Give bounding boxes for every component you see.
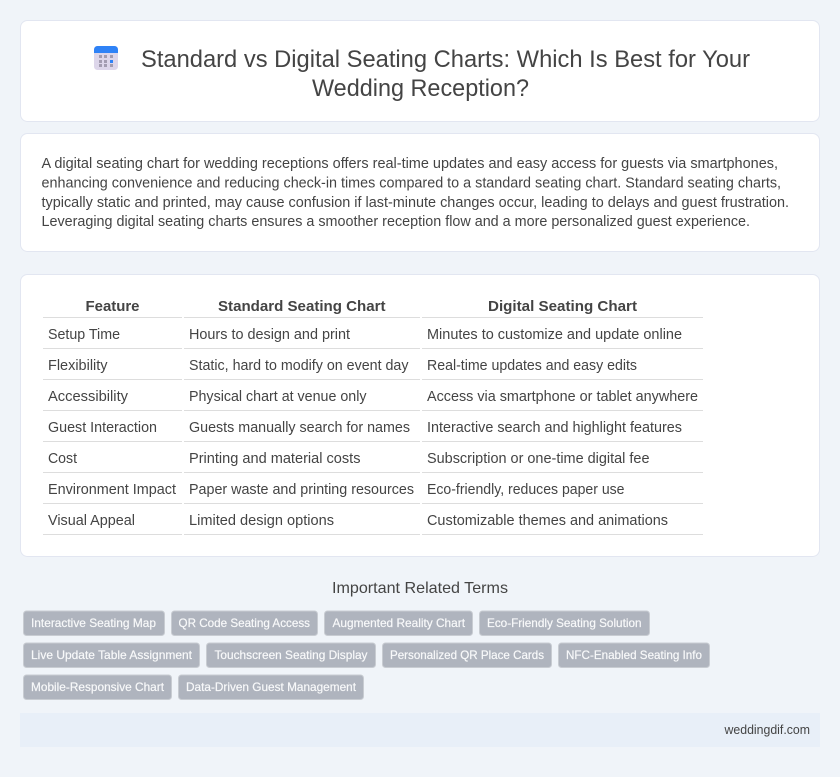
tag: Augmented Reality Chart bbox=[332, 616, 466, 630]
tag bbox=[24, 643, 200, 668]
row: guest interaction: Guests manually search for names bbox=[189, 420, 410, 436]
row: flexibility: Real-time updates and easy edits bbox=[427, 358, 637, 374]
panel: introduction text bbox=[20, 134, 820, 252]
row: environment impact bbox=[48, 482, 624, 498]
row: guest interaction: Interactive search and highlight features bbox=[427, 420, 682, 436]
table header: Feature bbox=[86, 298, 140, 315]
tag bbox=[324, 611, 472, 636]
panel: comparison table bbox=[20, 274, 820, 556]
row: flexibility bbox=[48, 358, 637, 374]
row: environment impact: Paper waste and printing resources bbox=[189, 482, 414, 498]
title: Wedding Reception? bbox=[312, 75, 529, 102]
row: visual appeal bbox=[48, 513, 668, 529]
footer: weddingdif.com bbox=[724, 723, 810, 737]
title: Standard vs Digital Seating Charts: Which Is Best for Your bbox=[141, 46, 750, 73]
row: visual appeal: Limited design options bbox=[189, 513, 334, 529]
row: visual appeal: Visual Appeal bbox=[48, 513, 135, 529]
row: environment impact: Eco-friendly, reduces paper use bbox=[427, 482, 624, 498]
row: accessibility: Physical chart at venue only bbox=[189, 389, 367, 405]
table header: Digital Seating Chart bbox=[488, 298, 637, 315]
row: flexibility: Static, hard to modify on event day bbox=[189, 358, 409, 374]
row: cost: Subscription or one-time digital fee bbox=[427, 451, 650, 467]
tag: QR Code Seating Access bbox=[178, 616, 310, 630]
panel: introduction text: A digital seating chart for wedding receptions offers real-time updates and easy access for guests via smartphones, bbox=[42, 156, 778, 172]
tag bbox=[206, 643, 376, 668]
tag: Eco-Friendly Seating Solution bbox=[487, 616, 642, 630]
row: cost bbox=[48, 451, 650, 467]
title bbox=[141, 46, 750, 102]
icon: calendar seating grid bbox=[94, 46, 118, 70]
tag: Personalized QR Place Cards bbox=[390, 648, 544, 662]
row: visual appeal: Customizable themes and animations bbox=[427, 513, 668, 529]
row: setup time: Minutes to customize and update online bbox=[427, 327, 682, 343]
panel: introduction text: enhancing convenience and reducing check-in times compared to a standard seating chart. Standard seating charts, bbox=[42, 176, 781, 192]
table header bbox=[86, 298, 637, 315]
row: environment impact: Environment Impact bbox=[48, 482, 176, 498]
panel: introduction text: typically static and printed, may cause confusion if last-minute changes occur, leading to delays and guest frustration. bbox=[42, 195, 789, 211]
tag bbox=[24, 675, 172, 700]
tag: Data-Driven Guest Management bbox=[186, 680, 357, 694]
row: accessibility: Accessibility bbox=[48, 389, 129, 405]
row: guest interaction bbox=[48, 420, 682, 436]
row: guest interaction: Guest Interaction bbox=[48, 420, 157, 436]
heading: related terms: Important Related Terms bbox=[332, 580, 508, 597]
row: accessibility: Access via smartphone or tablet anywhere bbox=[427, 389, 698, 405]
row: setup time: Setup Time bbox=[48, 327, 120, 343]
panel: title card bbox=[20, 20, 820, 122]
tag bbox=[382, 643, 552, 668]
panel: introduction text: Leveraging digital seating charts ensures a smoother reception flow and a more personalized guest experience. bbox=[42, 214, 750, 230]
tag bbox=[24, 611, 164, 636]
row: cost: Cost bbox=[48, 451, 77, 467]
row: flexibility: Flexibility bbox=[48, 358, 108, 374]
tag bbox=[178, 675, 364, 700]
tag bbox=[172, 611, 318, 636]
tag: Mobile-Responsive Chart bbox=[31, 680, 165, 694]
row: setup time bbox=[48, 327, 682, 343]
tag bbox=[558, 643, 710, 668]
tag bbox=[480, 611, 650, 636]
row: accessibility bbox=[48, 389, 698, 405]
tag: Interactive Seating Map bbox=[31, 616, 156, 630]
related term tags bbox=[24, 611, 710, 700]
row: setup time: Hours to design and print bbox=[189, 327, 350, 343]
table header: Standard Seating Chart bbox=[218, 298, 386, 315]
footer bbox=[20, 713, 820, 747]
tag: NFC-Enabled Seating Info bbox=[566, 648, 702, 662]
row: cost: Printing and material costs bbox=[189, 451, 360, 467]
tag: Live Update Table Assignment bbox=[31, 648, 193, 662]
tag: Touchscreen Seating Display bbox=[214, 648, 368, 662]
